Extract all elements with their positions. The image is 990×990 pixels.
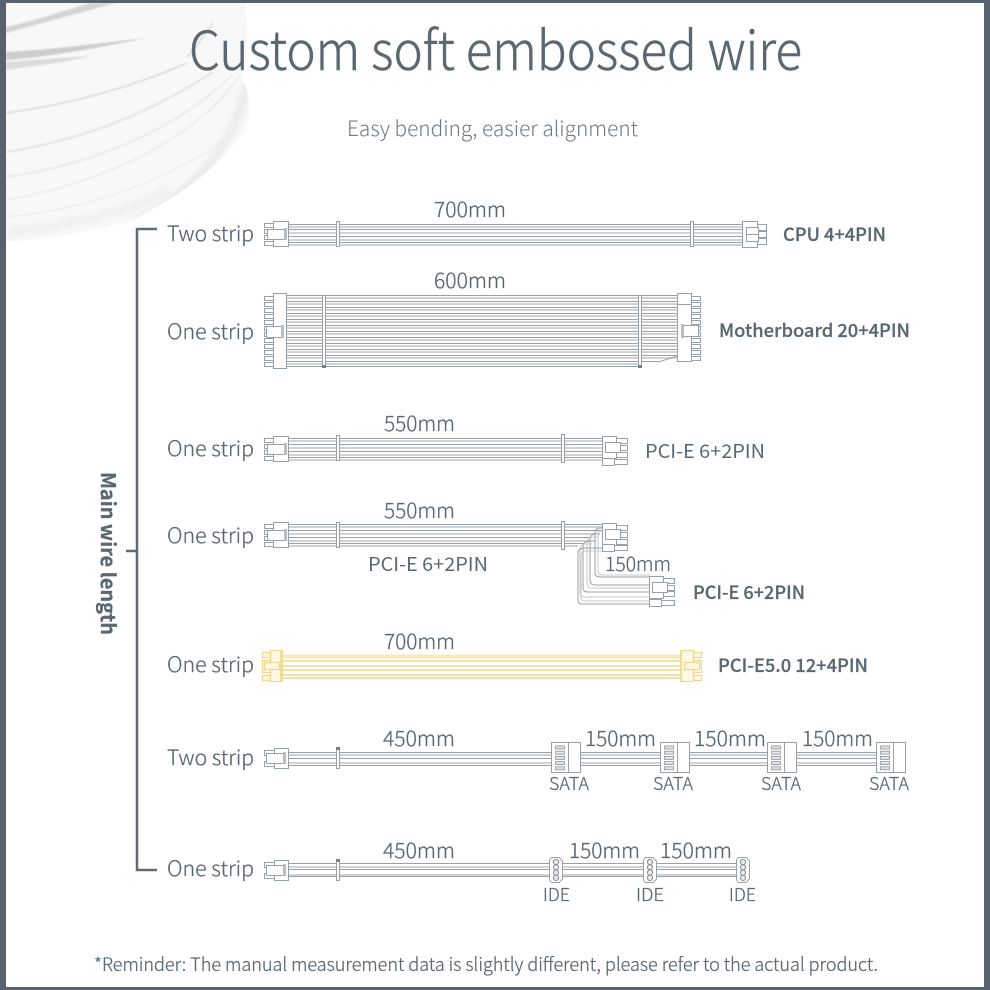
bracket: main wire length bbox=[126, 229, 157, 870]
length labels: 450mm bbox=[383, 835, 455, 865]
SATA labels: SATA bbox=[869, 770, 909, 796]
SATA connectors bbox=[552, 742, 906, 772]
row label: One strip bbox=[167, 520, 254, 550]
length labels: 150mm bbox=[569, 835, 640, 865]
length labels: 450mm bbox=[383, 723, 455, 753]
connector: 24 pin left bbox=[264, 294, 286, 368]
title: Custom soft embossed wire bbox=[189, 7, 802, 86]
SATA labels: SATA bbox=[549, 770, 589, 796]
label: branch connector: PCI-E 6+2PIN bbox=[693, 579, 805, 605]
connector label: PCI-E5.0 12+4PIN bbox=[718, 652, 868, 678]
SATA labels: SATA bbox=[653, 770, 693, 796]
connector label: Motherboard 20+4PIN bbox=[719, 317, 910, 343]
length labels bbox=[383, 723, 873, 753]
connector: 6+2 pin lower bbox=[650, 576, 674, 606]
cable: CPU 4+4PIN bbox=[167, 194, 886, 248]
cable: PCI-E 6+2PIN with 150mm daisy chain bbox=[167, 495, 805, 606]
SATA labels bbox=[549, 770, 909, 796]
length label: 700mm bbox=[434, 194, 506, 224]
row label: Two strip bbox=[167, 742, 254, 772]
row label: Two strip bbox=[167, 218, 254, 248]
length label: 600mm bbox=[434, 265, 506, 295]
branch wires bbox=[578, 528, 650, 604]
gold connector right bbox=[680, 650, 702, 682]
connector: 6+2 pin upper bbox=[602, 524, 628, 552]
length label: 550mm bbox=[384, 495, 455, 525]
gold connector left bbox=[262, 650, 283, 682]
label: PCI-E 6+2PIN on main run: PCI-E 6+2PIN bbox=[368, 550, 488, 577]
SATA labels: SATA bbox=[761, 770, 801, 796]
IDE labels: IDE bbox=[729, 881, 756, 907]
IDE labels bbox=[543, 881, 756, 907]
length labels bbox=[383, 835, 732, 865]
label: 150mm branch: 150mm bbox=[605, 548, 671, 577]
cable: Motherboard 20+4PIN bbox=[167, 265, 910, 368]
connector: left plug bbox=[264, 748, 288, 768]
connector: 20+4 pin right bbox=[678, 294, 700, 362]
cable: PCI-E5.0 12+4PIN (gold) bbox=[167, 626, 868, 682]
IDE labels: IDE bbox=[543, 881, 570, 907]
background coil of white cable bbox=[6, 3, 249, 240]
length labels: 150mm bbox=[585, 723, 656, 753]
cable: IDE chain bbox=[167, 835, 756, 907]
length label: 550mm bbox=[384, 408, 455, 438]
row label: One strip bbox=[167, 649, 254, 679]
row label: One strip bbox=[167, 853, 254, 883]
length labels: 150mm bbox=[802, 723, 873, 753]
IDE labels: IDE bbox=[636, 881, 664, 907]
footer reminder: *Reminder: The manual measurement data is slightly different, please refer to the actual product. bbox=[94, 951, 878, 977]
vertical label: main wire length: Main wire length bbox=[95, 472, 124, 635]
row label: One strip bbox=[167, 316, 254, 346]
length labels: 150mm bbox=[694, 723, 766, 753]
row label: One strip bbox=[167, 433, 254, 463]
length label: 700mm bbox=[384, 626, 455, 656]
length labels: 150mm bbox=[660, 835, 732, 865]
cable: PCI-E 6+2PIN bbox=[167, 408, 765, 466]
cable: SATA chain bbox=[167, 723, 909, 796]
connector label: PCI-E 6+2PIN bbox=[645, 437, 765, 464]
connector: left plug bbox=[264, 860, 288, 880]
IDE connectors bbox=[550, 858, 750, 882]
subtitle: Easy bending, easier alignment bbox=[347, 113, 639, 143]
connector: 6+2 pin bbox=[602, 436, 628, 466]
connector label: CPU 4+4PIN bbox=[783, 221, 886, 247]
